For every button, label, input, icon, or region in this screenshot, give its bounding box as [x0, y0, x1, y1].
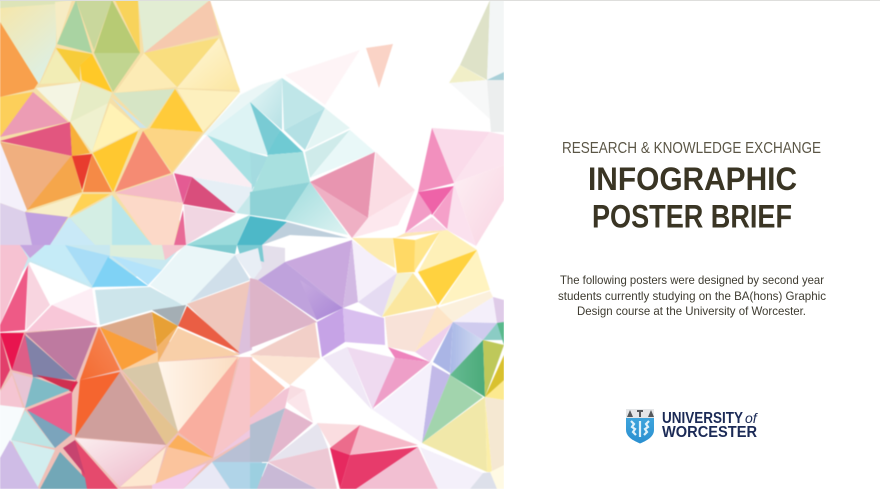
text block: course description: students currently studying on the BA(hons) Graphic: [558, 289, 826, 303]
text block: course description: [558, 273, 826, 318]
title: POSTER BRIEF: [592, 198, 792, 234]
icon: university shield: [626, 409, 654, 444]
heading: research and knowledge exchange: RESEARCH & KNOWLEDGE EXCHANGE: [562, 140, 821, 157]
wordmark: of: [745, 410, 759, 426]
title: INFOGRAPHIC: [588, 161, 797, 197]
text block: course description: The following posters were designed by second year: [560, 273, 824, 287]
text block: course description: Design course at the University of Worcester.: [577, 304, 806, 318]
logo: University of Worcester: [626, 409, 759, 444]
title: [588, 161, 797, 234]
panel: low-poly geometric mosaic artwork: [0, 0, 504, 489]
wordmark: UNIVERSITY: [662, 410, 744, 427]
wordmark: WORCESTER: [662, 424, 757, 441]
wordmark: [662, 410, 759, 441]
